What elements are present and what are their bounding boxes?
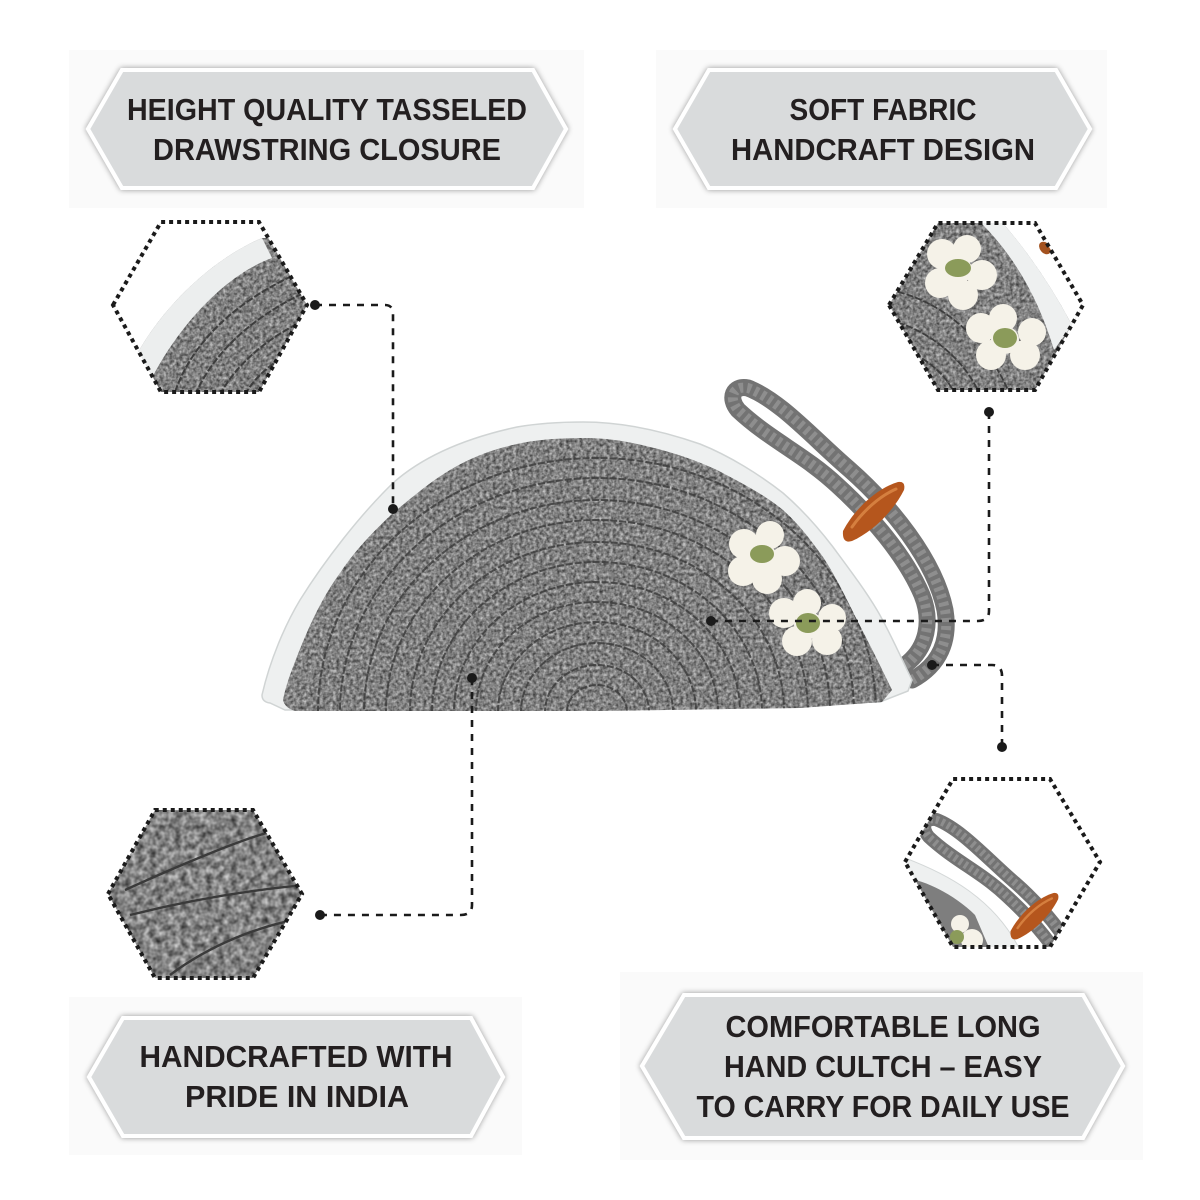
detail hexagon: rope edge bbox=[100, 215, 310, 395]
detail hexagon: flowers bbox=[885, 220, 1090, 395]
banner: soft fabric handcraft design bbox=[675, 70, 1090, 188]
connector: handle to loop detail bbox=[927, 660, 1007, 752]
flower: upper bbox=[728, 521, 800, 594]
banner: soft fabric handcraft design: SOFT FABRIC bbox=[790, 92, 976, 127]
banner: tasseled drawstring closure: DRAWSTRING CLOSURE bbox=[153, 132, 501, 167]
connector: flower detail to bag body bbox=[706, 407, 994, 626]
banner: tasseled drawstring closure bbox=[88, 70, 566, 188]
connector: bag body to texture detail bbox=[315, 673, 477, 920]
banner: comfortable long hand clutch: COMFORTABLE LONG bbox=[726, 1009, 1040, 1044]
panel: top-right banner backdrop bbox=[656, 50, 1107, 208]
detail hexagon: hand loop and bead bbox=[903, 777, 1102, 949]
banner: handcrafted with pride in India bbox=[89, 1018, 503, 1136]
banner: comfortable long hand clutch: TO CARRY FOR DAILY USE bbox=[696, 1089, 1070, 1124]
banner: tasseled drawstring closure: HEIGHT QUALITY TASSELED bbox=[127, 92, 527, 127]
banner: soft fabric handcraft design: HANDCRAFT DESIGN bbox=[731, 132, 1035, 167]
product: half-moon rope clutch bbox=[261, 379, 955, 711]
panel: top-left banner backdrop bbox=[69, 50, 584, 208]
detail hexagon: rope texture bbox=[105, 805, 305, 983]
flower: lower bbox=[769, 589, 846, 656]
banner: handcrafted with pride in India: HANDCRAFTED WITH bbox=[140, 1039, 452, 1074]
banner: handcrafted with pride in India: PRIDE IN INDIA bbox=[185, 1079, 409, 1114]
banner: comfortable long hand clutch bbox=[642, 995, 1123, 1138]
banner: comfortable long hand clutch: HAND CULTCH – EASY bbox=[724, 1049, 1042, 1084]
panel: bottom-left banner backdrop bbox=[69, 997, 522, 1155]
connector: edge detail to bag rim bbox=[310, 300, 398, 514]
panel: bottom-right banner backdrop bbox=[620, 972, 1143, 1160]
